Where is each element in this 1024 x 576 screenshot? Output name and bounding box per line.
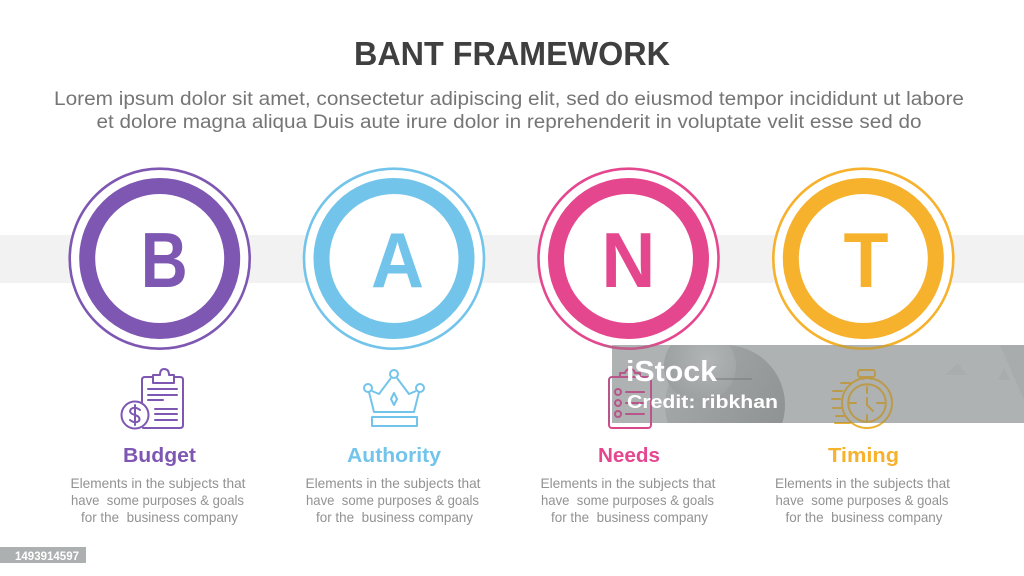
description: Authority [306,475,481,525]
watermark text: iStock [626,356,718,388]
description: Budget: have some purposes & goals [71,492,244,508]
watermark text: Credit: ribkhan [627,392,778,412]
description: Timing: have some purposes & goals [776,492,948,508]
circle: T [773,169,953,349]
image id tag: 1493914597 [15,549,79,563]
description: Budget [70,475,246,525]
circle: N [538,169,718,349]
description: Needs [540,475,716,525]
image id tag [0,547,86,563]
icon: authority crown [364,370,424,426]
description: Needs: for the business company [551,509,708,525]
circle: A: A [371,216,424,304]
description: Budget: for the business company [81,509,238,525]
description: Needs: Elements in the subjects that [540,475,716,491]
description: Budget: Elements in the subjects that [70,475,246,491]
description: Timing: Elements in the subjects that [775,475,950,491]
circle: B: B [141,216,188,304]
circle: T: T [844,216,888,304]
subtitle text [54,89,964,133]
title: BANT FRAMEWORK [354,35,670,72]
circle: N: N [601,216,655,304]
subtitle text: et dolore magna aliqua Duis aute irure dolor in reprehenderit in voluptate velit esse sed do [96,112,922,133]
description: Timing [775,475,950,525]
circle: B [70,169,250,349]
horizontal band [0,235,1024,283]
label: Timing: Timing [828,445,899,467]
label: Authority: Authority [347,445,442,467]
watermark banner [612,345,1024,423]
label: Needs: Needs [598,445,660,467]
icon: timing stopwatch [832,370,892,428]
description: Needs: have some purposes & goals [541,492,714,508]
watermark text [626,356,778,412]
description: Timing: for the business company [786,509,942,525]
subtitle text: Lorem ipsum dolor sit amet, consectetur adipiscing elit, sed do eiusmod tempor incididunt ut labore [54,89,964,110]
description: Authority: have some purposes & goals [306,492,479,508]
label: Budget: Budget [123,445,196,467]
icon: budget clipboard with dollar coin [122,369,183,428]
description: Authority: for the business company [316,509,473,525]
description: Authority: Elements in the subjects that [306,475,481,491]
icon: needs checklist [609,369,651,428]
circle: A [304,169,484,349]
